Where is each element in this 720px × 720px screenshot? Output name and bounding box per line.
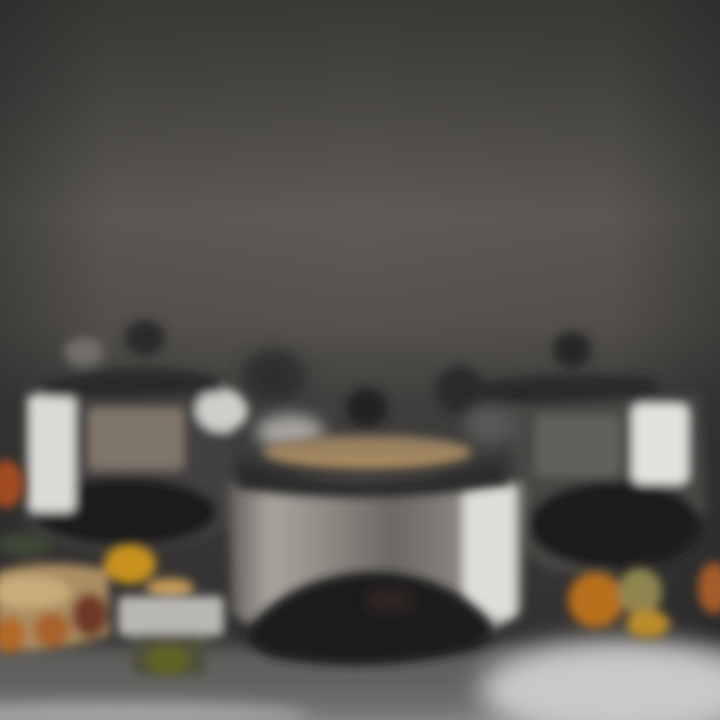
left cooker lower dark band [33,478,217,546]
food: right fruit [568,562,720,638]
green leaves [0,533,53,557]
yellow fruit [104,544,156,584]
front cooker dark rim [236,462,512,497]
right cooker knob [553,332,591,368]
orange [568,572,624,628]
front cooker red indicator [366,590,414,610]
right cooker window [535,415,620,477]
left cooker lid [40,368,222,398]
slow cooker: back middle knob [242,350,306,402]
front cooker lid food [264,435,472,469]
front cooker white panel [464,484,516,618]
food: left pile of bread and fruit [0,460,194,653]
left cooker white panel [29,394,75,512]
small white bowl with green contents [118,596,224,676]
front cooker body [228,482,526,654]
right cooker body [505,395,706,575]
orange at right edge [698,562,720,614]
slow cooker: right [436,332,706,575]
left cooker knob [125,320,165,356]
front cooker knob [346,388,388,428]
right cooker lid [445,375,660,405]
slow cooker: front centre [228,388,526,665]
front cooker back lid highlights [256,414,324,450]
left cooker body [24,395,232,552]
left cooker window [88,408,184,470]
front cooker base [247,572,494,665]
slow cooker: left [24,320,248,552]
left cooker right highlight [196,388,248,432]
orange fruit row [0,617,26,653]
counter surface [0,640,720,720]
green-yellow fruit [618,568,662,616]
orange at far left edge [0,460,24,508]
right cooker lower dark band [529,481,701,569]
left cooker lid highlight [64,337,104,367]
bread [0,563,110,651]
right cooker white panel [632,404,688,484]
